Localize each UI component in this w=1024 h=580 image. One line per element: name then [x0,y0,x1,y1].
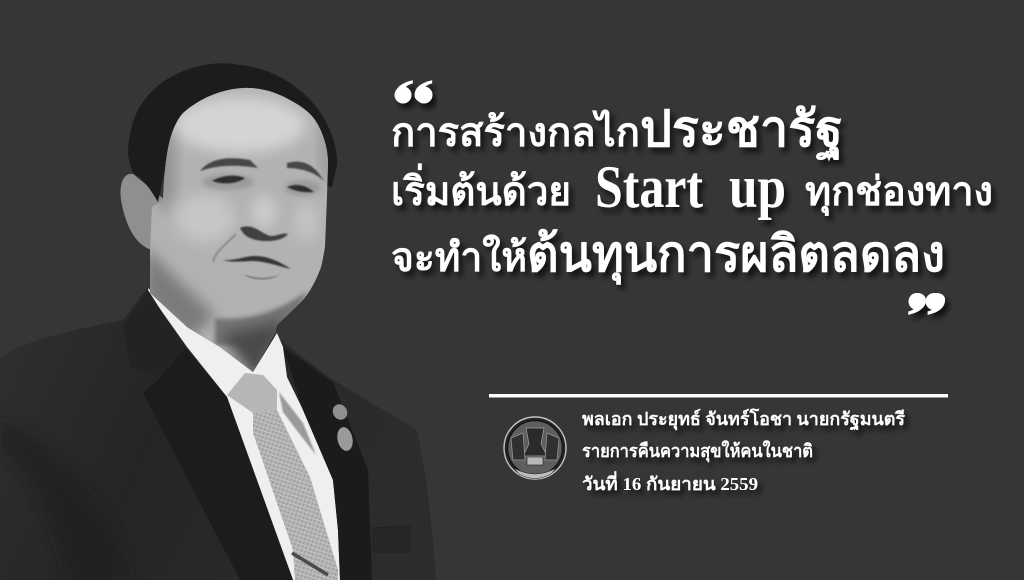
seal central vessel [523,428,547,456]
line 2 start: เริ่มต้นด้วย [391,163,571,214]
opening quote mark [391,64,435,144]
right eye [287,185,314,192]
closing quote right ball [926,293,942,310]
seal inner ring [508,420,562,476]
hair [128,63,337,202]
shirt and collar [148,288,340,580]
forehead highlight [174,97,306,153]
jacket lapel right [283,347,372,580]
line 3 regular: จะทำให้ [391,234,527,280]
tie [227,373,338,580]
smile fold [213,234,236,262]
line 1 regular: การสร้างกลไก [391,109,640,155]
quote headline [391,64,993,357]
left eye [212,176,245,183]
eye socket left [202,174,254,190]
line 3 emphasis: ต้นทุนการผลิตลดลง [527,226,945,285]
left cheek highlight [175,194,235,242]
line 2 end: ทุกช่องทาง [805,169,993,217]
icon: government seal [504,417,566,479]
line 1 emphasis: ประชารัฐ [640,101,843,161]
jacket pocket [373,526,410,552]
jacket lower lapel left [143,348,293,580]
headline line 3 [391,226,945,285]
sleeve fold shading [0,420,130,580]
tie clip [292,553,328,575]
temple shade [155,128,175,212]
nose shadow [240,226,288,241]
face and neck [150,88,328,372]
neck shadow [219,317,282,372]
jacket upper lapel left [123,290,185,378]
seal base band [514,468,556,478]
pin upper [330,402,350,422]
left brow [200,158,258,171]
mouth line [222,256,291,269]
seal disc [504,417,566,479]
seal plinth [527,457,543,465]
face skin [150,88,328,372]
closing quote glyph: ” [905,277,949,357]
speaker name: พลเอก ประยุทธ์ จันทร์โอชา นายกรัฐมนตรี [582,408,905,431]
right brow [287,162,324,181]
headline line 1 [391,101,843,161]
pin lower [335,426,355,452]
eye socket right [284,180,320,196]
opening quote glyph: “ [391,64,435,144]
right temple shade [318,129,328,180]
chin shade [215,290,308,345]
seal guardian figures [511,433,559,460]
line 2 up: up [729,154,786,220]
lower lip shadow [243,274,279,279]
opening quote right ball [416,86,432,104]
nose bridge highlight [252,196,276,228]
closing quote left ball [908,293,926,310]
tie blade [253,410,338,580]
shirt shadow beside tie [279,392,316,455]
source attribution [582,408,905,494]
jacket [0,288,436,580]
lapel pins [330,402,355,452]
portrait: man in dark suit, greyscale [0,63,436,580]
opening quote left ball [394,86,412,104]
headline line 2 [391,154,993,220]
left jowl shade [145,245,215,340]
programme name: รายการคืนความสุขให้คนในชาติ [582,440,813,463]
tie knot [227,373,277,413]
line 2 Start: Start [595,154,703,220]
closing quote mark [905,277,949,357]
right cheek highlight [294,204,318,240]
divider rule [489,394,948,398]
ear [120,174,165,250]
date: วันที่ 16 กันยายน 2559 [582,471,758,494]
